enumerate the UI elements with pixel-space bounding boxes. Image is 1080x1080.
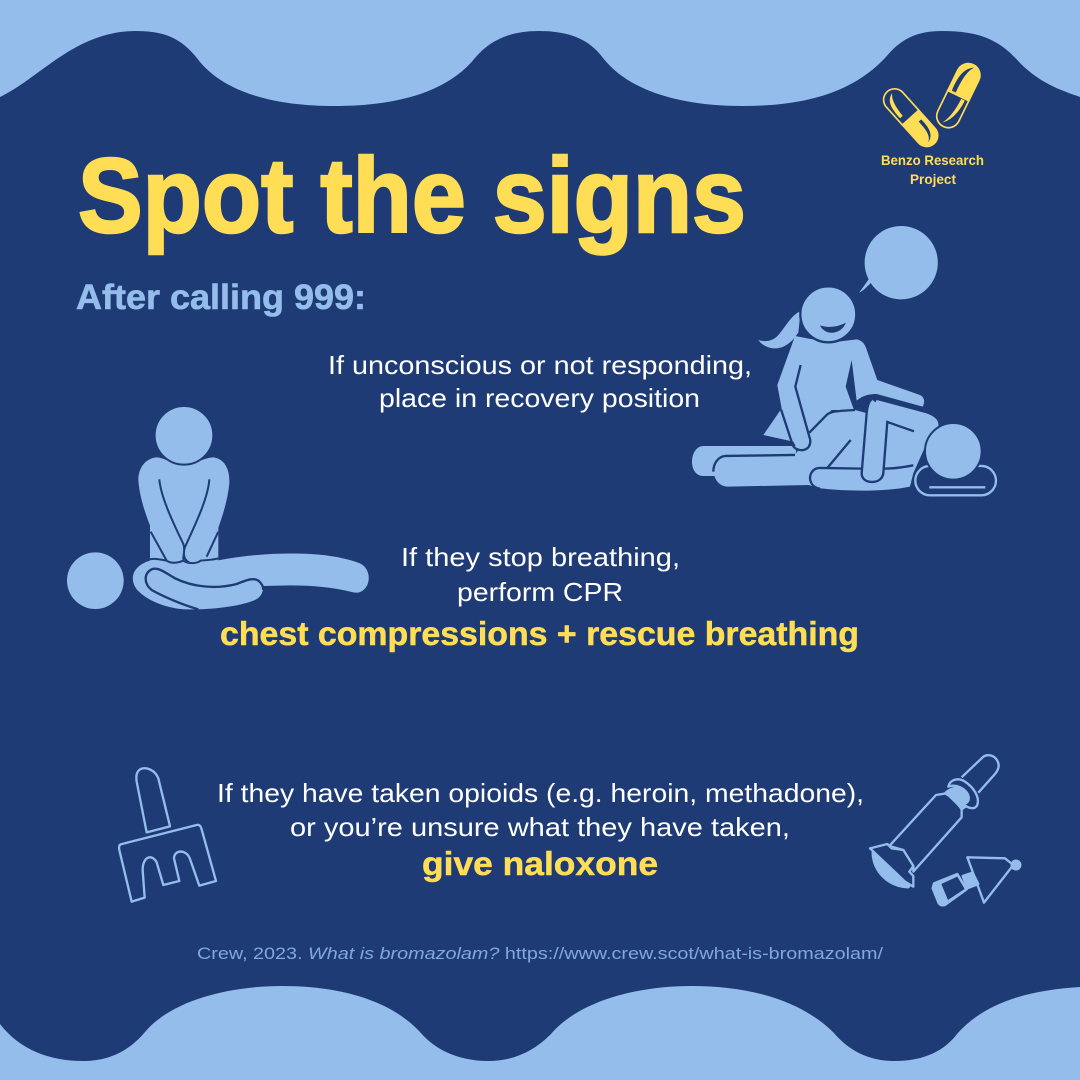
text block: CPR: If they stop breathing,: [401, 542, 680, 572]
logo: [879, 60, 984, 187]
lying legs: [692, 446, 797, 476]
body outlines: [713, 365, 925, 489]
patient body: [133, 554, 369, 609]
cap body: [933, 874, 967, 905]
top wave: [0, 0, 1080, 106]
text block: recovery position: place in recovery position: [379, 383, 700, 413]
arm lines: [150, 479, 218, 563]
text block: CPR: [220, 542, 859, 652]
lying body: [714, 400, 938, 491]
connector: [963, 873, 978, 888]
cone tip: [1012, 861, 1020, 869]
torso of rescuer: [150, 517, 218, 563]
collar ring: [948, 779, 978, 808]
logo text: [881, 152, 984, 187]
icon: left pill: [879, 84, 942, 151]
subheading: After calling 999:: [76, 278, 366, 317]
text block: naloxone: [217, 778, 864, 882]
text block: CPR: perform CPR: [457, 577, 623, 607]
speech bubble: [859, 226, 938, 299]
base cap: [873, 850, 913, 887]
text block: naloxone: give naloxone: [422, 845, 658, 882]
text block: recovery position: [328, 350, 752, 413]
title: Spot the signs: [78, 137, 746, 255]
patient arm outline: [146, 569, 263, 609]
text block: CPR: chest compressions + rescue breathing: [220, 615, 859, 652]
ponytail: [758, 311, 801, 348]
head of helper: [800, 286, 856, 342]
pillow: [915, 466, 996, 495]
head of patient: [67, 552, 124, 609]
bottom wave: [0, 986, 1080, 1080]
icon: right pill: [933, 60, 984, 132]
text block: recovery position: If unconscious or not responding,: [328, 350, 752, 380]
smile: [820, 323, 846, 333]
icon: recovery position: [692, 226, 996, 495]
plunger: [962, 755, 999, 793]
collar band: [945, 788, 971, 809]
icon: CPR: [67, 406, 369, 609]
citation: Crew, 2023. What is bromazolam? https://www.crew.scot/what-is-bromazolam/: [197, 944, 883, 963]
kneeling figure: [763, 336, 924, 450]
text block: naloxone: or you’re unsure what they have taken,: [290, 812, 790, 842]
cone: [967, 857, 1013, 903]
icon: naloxone spray: [870, 755, 1020, 905]
barrel: [889, 793, 962, 872]
logo text: Benzo Research: [881, 152, 984, 168]
rescuer shoulders and arms: [138, 457, 229, 564]
icon: nasal spray nozzle: [119, 768, 216, 902]
head of patient: [925, 423, 982, 480]
head of rescuer: [155, 406, 213, 465]
text block: naloxone: If they have taken opioids (e.g. heroin, methadone),: [217, 778, 864, 808]
logo text: Project: [910, 171, 956, 187]
